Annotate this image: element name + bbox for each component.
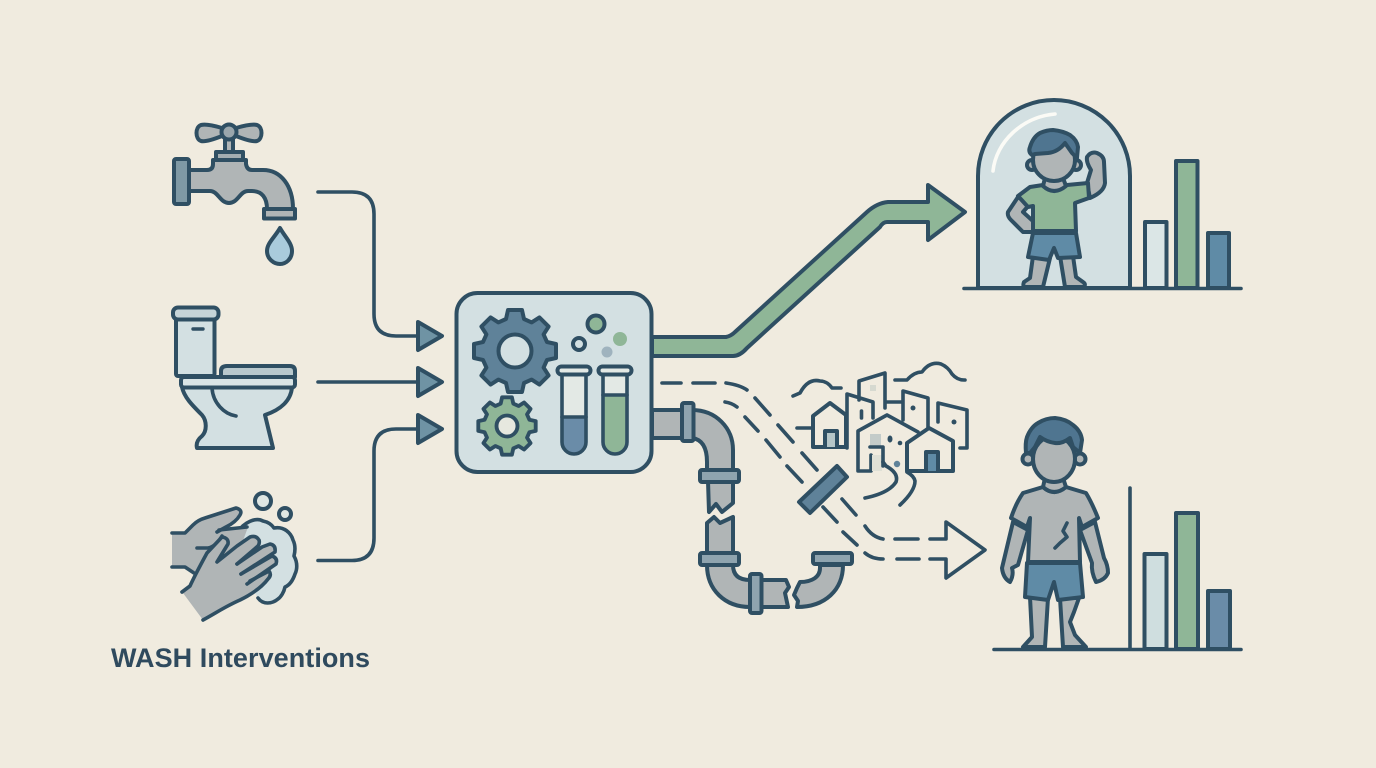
tap wall flange [174,159,189,204]
front hand [183,536,277,620]
chart: unwell child bars [994,488,1241,650]
house right [907,428,953,471]
icon: toilet [173,308,295,448]
clouds [793,380,841,396]
village [793,363,967,505]
tap body [188,160,293,209]
label: WASH Interventions: WASH Interventions [111,643,370,673]
blocking bar [799,466,847,513]
test tube: blue liquid [558,366,590,454]
face [1033,139,1075,181]
pipe flange [700,470,739,482]
toilet seat lid [221,366,295,377]
pipe lower vertical and bend [707,517,789,607]
back hand [172,508,248,572]
tap handle [196,124,262,152]
toilet tank [176,318,214,376]
gray pipe segment from box [652,410,733,471]
chart: protected child bars [964,161,1241,288]
arrow: tap to treatment box [318,192,442,350]
pipe outlet bend [794,565,843,607]
hand on hip arm [1008,197,1034,232]
test tube: green liquid [598,366,632,454]
legs [1023,597,1048,647]
neck [1043,178,1066,191]
ears [1027,160,1037,170]
pipe flange [700,553,739,565]
unwell child [1002,418,1108,647]
hair [1026,418,1082,453]
legs [1023,256,1050,287]
torn shirt [1011,487,1098,562]
arrow: green positive pathway [652,185,965,356]
glass dome [978,100,1130,288]
tap nozzle [264,209,295,218]
pipe outlet flange [813,553,852,564]
arrow: hands to treatment box [318,415,442,560]
pipe flange near box [682,403,694,441]
arms [1002,522,1028,582]
dome highlight [993,114,1055,171]
back buildings [847,373,967,448]
toilet seat band [181,377,295,388]
arrow: toilet to treatment box [318,368,442,396]
large blue gear [474,310,556,392]
green shirt [1018,183,1089,231]
icon: hands washing with soap [172,493,297,620]
contamination dashed paths [662,383,919,559]
small green gear [478,397,536,455]
face [1033,436,1075,482]
shorts [1028,233,1080,260]
roads [865,462,897,498]
shorts [1025,563,1083,600]
pipe upper stub with break [708,481,733,512]
soap bubbles [255,493,271,509]
hair [1029,130,1078,158]
neck [1043,478,1066,492]
protected child under dome [978,100,1130,288]
dashed arrow head [930,522,985,578]
bubbles [573,316,627,358]
raised arm [1087,152,1105,198]
shirt crack [1055,523,1067,548]
icon: water tap with drop [174,124,295,264]
toilet bowl [182,387,292,448]
panel: treatment box [456,293,652,472]
water drop [267,228,292,264]
soap foam [238,520,297,603]
pipe flange [750,574,762,613]
broken pipe lower segments [700,470,852,613]
house left [813,403,846,447]
ears [1022,454,1034,464]
house centre [858,415,918,471]
